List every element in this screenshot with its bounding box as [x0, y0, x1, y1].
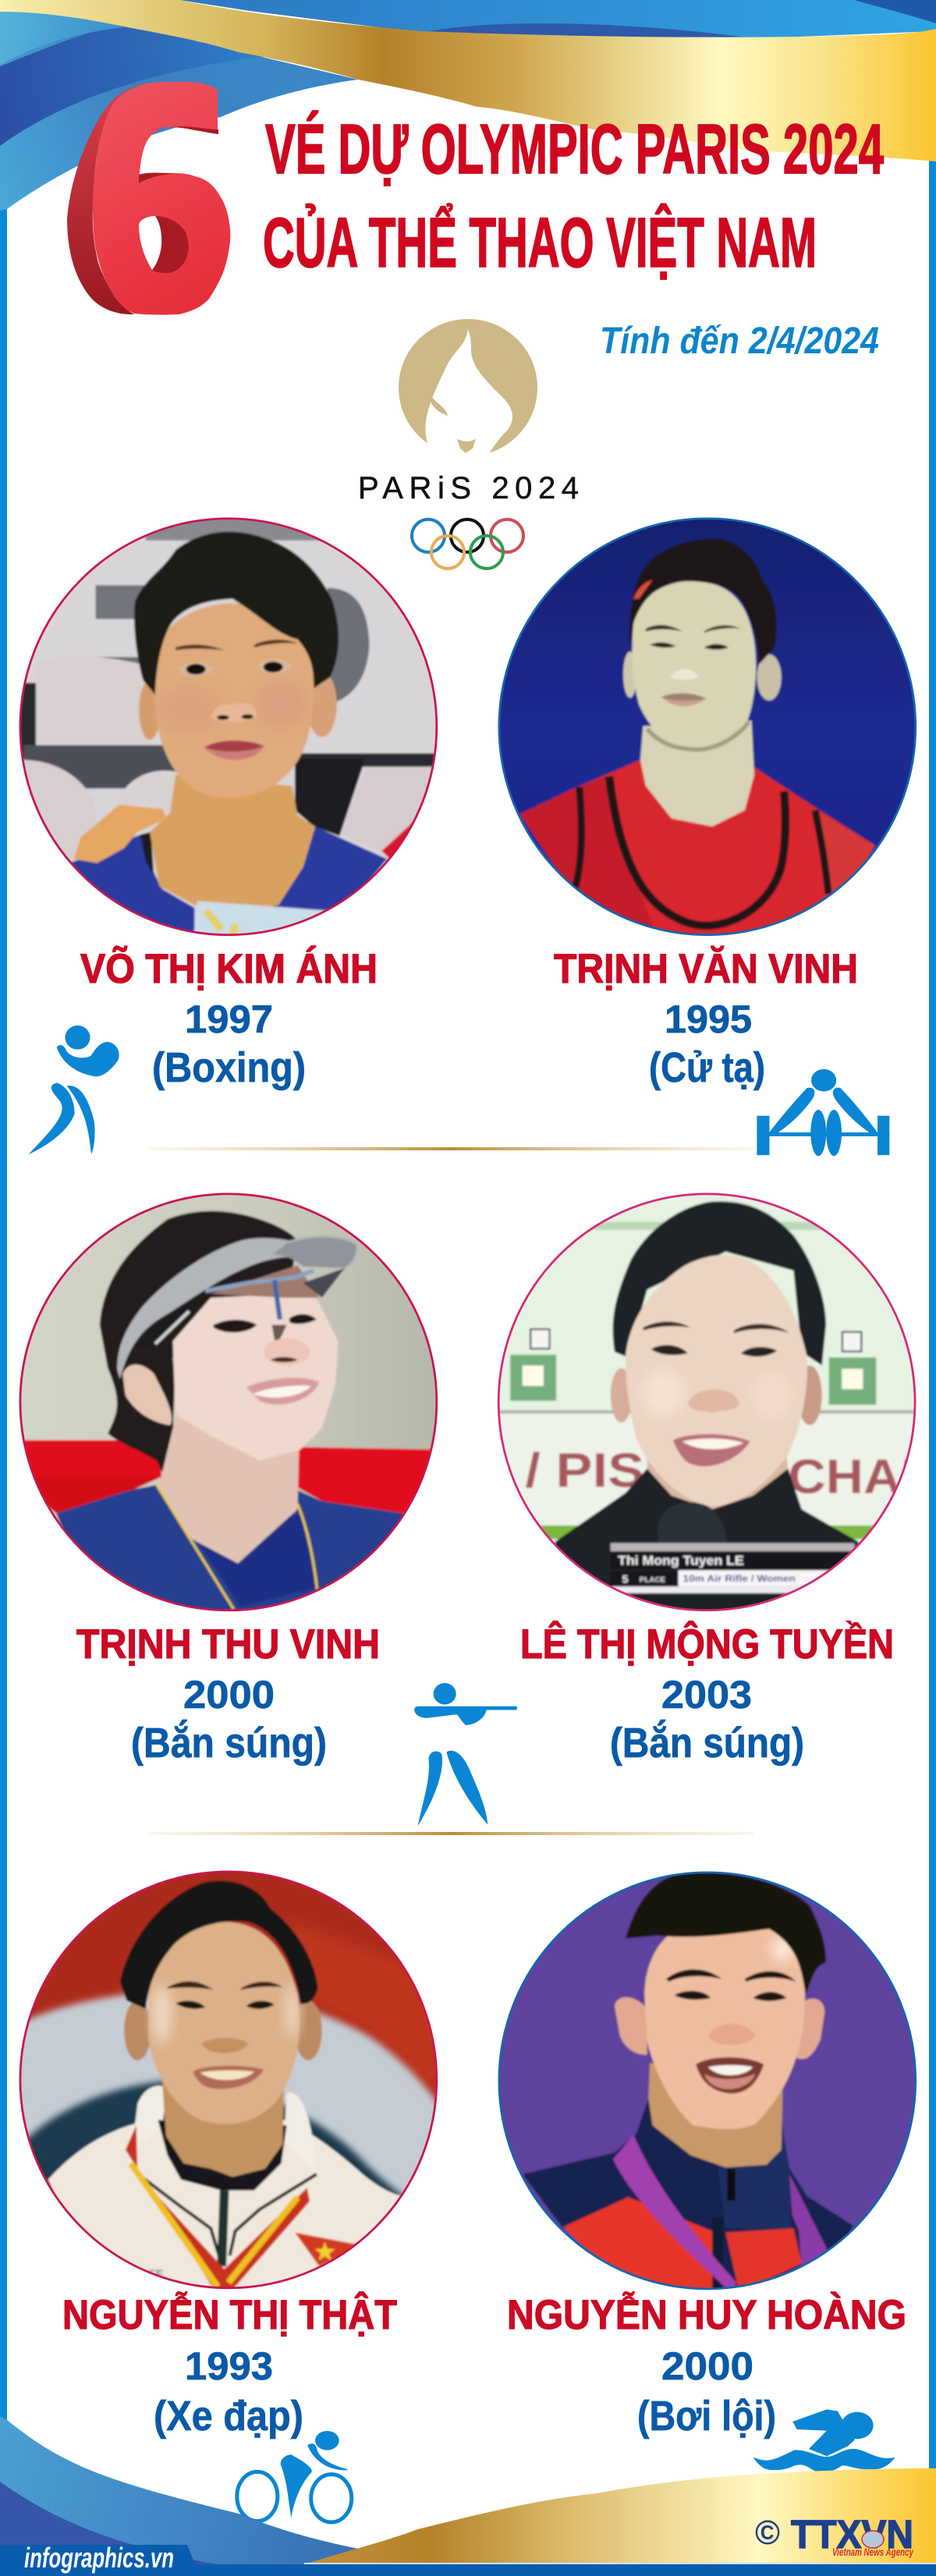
straps — [609, 776, 785, 926]
athlete 5 text — [62, 2291, 397, 2440]
neck — [162, 2079, 284, 2177]
left blue bands — [0, 8, 358, 211]
icon: boxing — [29, 1026, 119, 1154]
Paris 2024 emblem — [358, 319, 579, 505]
athlete 4 text — [520, 1620, 894, 1766]
big 3D number 6 — [67, 82, 230, 315]
face — [626, 1255, 807, 1507]
neck — [159, 1406, 299, 1564]
athlete 6 text — [507, 2291, 906, 2440]
icon: shooting — [414, 1683, 517, 1826]
footer ribbons — [0, 2416, 936, 2576]
photo: Nguyễn Thị Thật — [16, 1868, 441, 2293]
athlete 1 text: 1997 — [185, 997, 273, 1041]
red cushions — [21, 1440, 162, 1513]
hair — [120, 1881, 318, 2009]
icon: weightlifting — [757, 1069, 889, 1156]
jacket navy — [523, 2098, 853, 2293]
face — [154, 604, 314, 798]
ears — [757, 654, 782, 700]
medal ribbon — [126, 2125, 310, 2293]
athlete 2 text: 1995 — [665, 997, 752, 1041]
forehead shade — [211, 1265, 319, 1298]
flag — [295, 2232, 365, 2266]
athlete 3 text: (Bắn súng) — [131, 1720, 327, 1766]
collar — [135, 2085, 315, 2174]
photo: Nguyễn Huy Hoàng — [495, 1868, 920, 2293]
neck — [647, 1447, 788, 1509]
lanyard — [157, 1485, 317, 1610]
jaw line — [647, 722, 749, 749]
glasses frame — [205, 1270, 314, 1291]
icon: cycling — [237, 2431, 352, 2522]
athlete 3 text — [76, 1621, 380, 1766]
target arc background — [16, 1990, 441, 2293]
microphone — [658, 1502, 726, 1550]
neck — [640, 721, 754, 827]
features — [646, 625, 741, 632]
date note: Tính đến 2/4/2024 — [600, 321, 879, 362]
face — [173, 1292, 339, 1461]
hair — [626, 1873, 826, 1995]
athlete 4 text: LÊ THỊ MỘNG TUYỀN — [520, 1620, 894, 1667]
top blue ribbon — [179, 0, 936, 39]
athlete 5 text: NGUYỄN THỊ THẬT — [62, 2291, 397, 2338]
hair — [613, 1201, 826, 1366]
athlete 2 text: TRỊNH VĂN VINH — [554, 945, 858, 992]
title — [263, 110, 884, 282]
features — [214, 1320, 257, 1333]
ears — [139, 680, 161, 739]
athlete 5 text: 1993 — [185, 2344, 273, 2388]
photo: Lê Thị Mộng Tuyền: 5 — [622, 1573, 629, 1586]
caption bars — [611, 1543, 855, 1551]
ears — [615, 1997, 647, 2055]
banner letters: / PIS — [525, 1444, 644, 1498]
photo: Lê Thị Mộng Tuyền: 10m Air Rifle / Women — [683, 1573, 796, 1584]
footer blue band — [0, 2416, 358, 2566]
photo: Võ Thị Kim Ánh — [16, 515, 441, 940]
face — [644, 1919, 805, 2129]
footer gold ribbon — [304, 2468, 936, 2564]
athlete 2 text: (Cử tạ) — [649, 1044, 765, 1091]
wordmark: PARiS 2024 — [358, 471, 579, 505]
hair — [134, 532, 339, 695]
Olympic rings — [412, 519, 523, 569]
gold ribbon — [0, 0, 936, 161]
hand — [74, 805, 168, 863]
photo: Lê Thị Mộng Tuyền — [495, 1189, 920, 1615]
divider 1 — [149, 1147, 753, 1150]
banner — [495, 1412, 920, 1525]
jacket — [555, 1469, 859, 1614]
ear — [122, 1365, 172, 1425]
TTXVN logo: © — [755, 2514, 780, 2552]
medal ribbon — [613, 2135, 736, 2293]
athlete 3 text: 2000 — [183, 1673, 275, 1717]
infographics.vn tab: infographics.vn — [24, 2542, 174, 2574]
footer bar — [0, 2564, 936, 2576]
icon: swimming — [753, 2409, 895, 2472]
ears — [611, 1368, 633, 1423]
features — [643, 1321, 789, 1333]
athlete 4 text: 2003 — [661, 1673, 752, 1717]
photo: Lê Thị Mộng Tuyền: CHAI — [788, 1449, 916, 1504]
shirt — [576, 758, 875, 934]
athlete 1 text: (Boxing) — [152, 1044, 306, 1091]
red panels — [563, 2197, 712, 2293]
targets — [510, 1355, 556, 1401]
athlete 1 text — [80, 945, 378, 1091]
athlete 5 text: (Xe đạp) — [154, 2393, 303, 2440]
zip — [719, 2169, 743, 2201]
hair — [100, 1211, 297, 1483]
divider 2 — [149, 1832, 753, 1835]
athlete 2 text — [554, 945, 858, 1091]
under collar dark — [158, 2120, 287, 2191]
face — [633, 581, 756, 748]
athlete 3 text: TRỊNH THU VINH — [76, 1621, 380, 1667]
photo: Trịnh Văn Vinh — [495, 515, 920, 940]
athlete 6 text: (Bơi lội) — [637, 2393, 776, 2440]
features — [168, 1982, 282, 1990]
athlete 6 text: NGUYỄN HUY HOÀNG — [507, 2291, 906, 2338]
athlete 4 text: (Bắn súng) — [610, 1720, 804, 1766]
ears — [124, 2000, 151, 2060]
header ribbons — [0, 0, 936, 211]
features — [666, 1969, 796, 1982]
face — [148, 1922, 300, 2124]
features — [176, 640, 297, 650]
zip lines — [136, 2173, 317, 2255]
visor — [117, 1235, 358, 1379]
neck — [150, 775, 315, 913]
hair — [629, 539, 777, 664]
photo: Lê Thị Mộng Tuyền: PLACE — [640, 1575, 665, 1583]
left page border — [0, 203, 7, 2425]
number 6 counter — [139, 216, 189, 273]
neck — [648, 2063, 782, 2167]
card — [192, 899, 327, 934]
TTXVN logo: TTXVN — [791, 2512, 913, 2557]
right page border — [929, 156, 936, 2472]
photo: Trịnh Thu Vinh — [16, 1189, 441, 1614]
athlete 1 text: VÕ THỊ KIM ÁNH — [80, 945, 378, 992]
athlete 6 text: 2000 — [661, 2344, 753, 2388]
shirt — [70, 827, 387, 940]
caption text: Thi Mong Tuyen LE — [618, 1553, 744, 1568]
jacket letters: FE — [148, 2269, 164, 2282]
shirt — [55, 1483, 404, 1610]
